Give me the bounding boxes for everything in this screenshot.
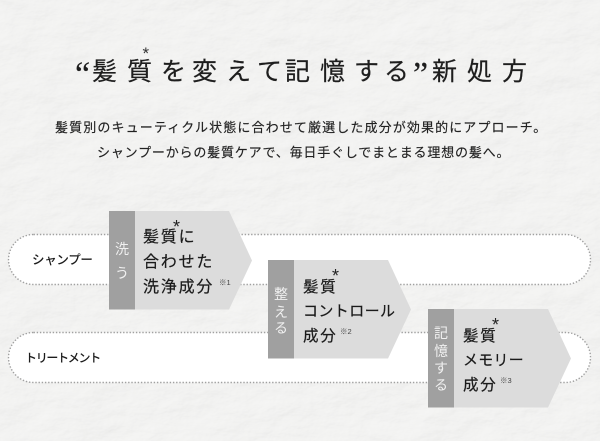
step 3: memory arrow [428, 309, 571, 408]
step 2: condition arrow: 整 [274, 286, 288, 302]
title: “ [75, 56, 90, 93]
step 3: memory arrow: 髪質 [463, 328, 498, 345]
title: 髪 [92, 58, 117, 86]
step 2: condition arrow: ※2 [340, 327, 352, 336]
step 1: wash arrow: う [115, 265, 129, 281]
step 3: memory arrow: 憶 [434, 343, 448, 359]
step 2: condition arrow: 髪質 [303, 279, 338, 296]
step 1: wash arrow [109, 211, 252, 310]
title: 方 [502, 58, 527, 86]
step 1: wash arrow: 洗 [115, 241, 129, 257]
title: 変 [192, 58, 217, 86]
step 3: memory arrow: * [492, 315, 499, 335]
title: 憶 [320, 58, 345, 86]
step 2: condition arrow: る [274, 320, 288, 336]
title: え [226, 58, 251, 86]
label: shampoo: シャンプー [32, 253, 93, 267]
pills: shampoo and treatment bands [8, 234, 592, 384]
title: す [354, 58, 379, 86]
step 1: wash arrow: * [173, 217, 180, 237]
title: る [384, 58, 409, 86]
title [75, 44, 527, 93]
intro text: 髪質別のキューティクル状態に合わせて厳選した成分が効果的にアプローチ。 [55, 120, 547, 135]
step 3: memory arrow: メモリー [463, 352, 524, 369]
step 2: condition arrow: 成分 [303, 328, 338, 345]
step 1: wash arrow: 洗浄成分 [143, 279, 214, 296]
title: て [257, 58, 282, 86]
title: 記 [285, 58, 310, 86]
step 2: condition arrow: え [274, 304, 288, 320]
step 3: memory arrow: る [434, 377, 448, 393]
title: を [161, 58, 186, 86]
step 1: wash arrow: 髪質に [143, 229, 196, 246]
step 1: wash arrow: ※1 [219, 278, 231, 287]
label: treatment: トリートメント [25, 351, 100, 365]
title: ” [413, 56, 428, 93]
intro text: シャンプーからの髪質ケアで、毎日手ぐしでまとまる理想の髪へ。 [97, 145, 510, 160]
step 2: condition arrow: コントロール [303, 303, 395, 320]
step 2: condition arrow: * [332, 266, 339, 286]
title: * [142, 44, 149, 63]
step 3: memory arrow: 記 [434, 325, 448, 341]
title: 処 [467, 58, 492, 86]
step 3: memory arrow: 成分 [463, 377, 498, 394]
step 3: memory arrow: ※3 [500, 376, 512, 385]
step 3: memory arrow: す [434, 360, 448, 376]
step 2: condition arrow [268, 260, 411, 358]
intro text [55, 120, 547, 160]
title: 新 [432, 58, 457, 86]
step 1: wash arrow: 合わせた [143, 254, 214, 271]
title: 質 [127, 58, 152, 86]
